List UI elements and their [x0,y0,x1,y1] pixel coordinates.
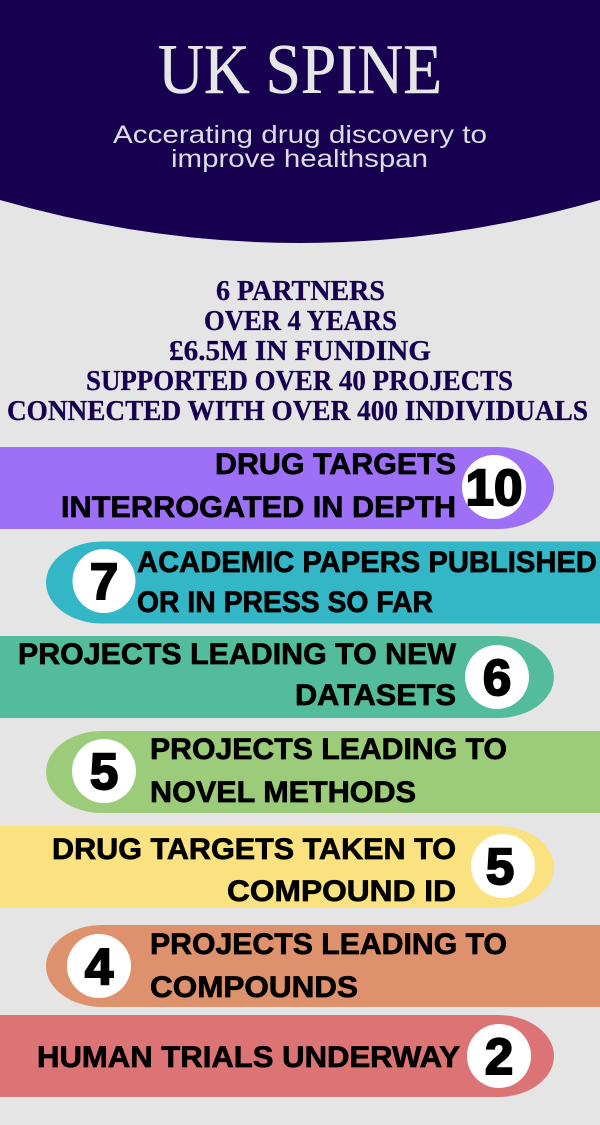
panel: drug targets interrogated: INTERROGATED IN DEPTH [61,491,456,524]
panel: compounds: PROJECTS LEADING TO [150,928,507,961]
panel: new datasets: DATASETS [295,679,456,712]
panel: novel methods [46,731,600,813]
panel: new datasets: 6 [483,649,511,706]
panel: human trials [0,1015,554,1097]
panel: drug targets interrogated [0,447,554,529]
panel: compound id: COMPOUND ID [227,875,456,908]
panel: new datasets: PROJECTS LEADING TO NEW [18,638,457,671]
text block: key statistics: OVER 4 YEARS [204,305,397,337]
panel: compound id: 5 [486,838,514,895]
panel: human trials: 2 [485,1028,513,1085]
subtitle: Accerating drug discovery to [113,121,487,149]
panel: compound id [0,826,554,908]
panel: novel methods: 5 [90,743,118,800]
panel: header [0,0,600,243]
panel: novel methods: PROJECTS LEADING TO [150,733,507,766]
title: UK SPINE [158,31,442,109]
panel: compounds: 4 [85,938,114,995]
subtitle: improve healthspan [171,145,428,173]
panel: academic papers: 7 [90,553,118,610]
panel: compound id: DRUG TARGETS TAKEN TO [52,833,456,866]
text block: key statistics: 6 PARTNERS [216,275,385,307]
panel: compounds: COMPOUNDS [150,971,358,1004]
panel: drug targets interrogated: 10 [466,459,522,516]
panel: novel methods: NOVEL METHODS [150,776,416,809]
panel: academic papers: OR IN PRESS SO FAR [137,586,433,619]
subtitle [113,121,487,173]
panel: human trials: HUMAN TRIALS UNDERWAY [37,1041,460,1074]
text block: key statistics [7,275,588,427]
panel: new datasets [0,636,554,718]
panel: drug targets interrogated: DRUG TARGETS [215,448,456,481]
panel: academic papers [46,542,600,624]
panel: compounds [46,925,600,1007]
text block: key statistics: SUPPORTED OVER 40 PROJECTS [86,365,513,397]
panel: academic papers: ACADEMIC PAPERS PUBLISHED [137,546,597,579]
text block: key statistics: £6.5M IN FUNDING [169,335,431,367]
